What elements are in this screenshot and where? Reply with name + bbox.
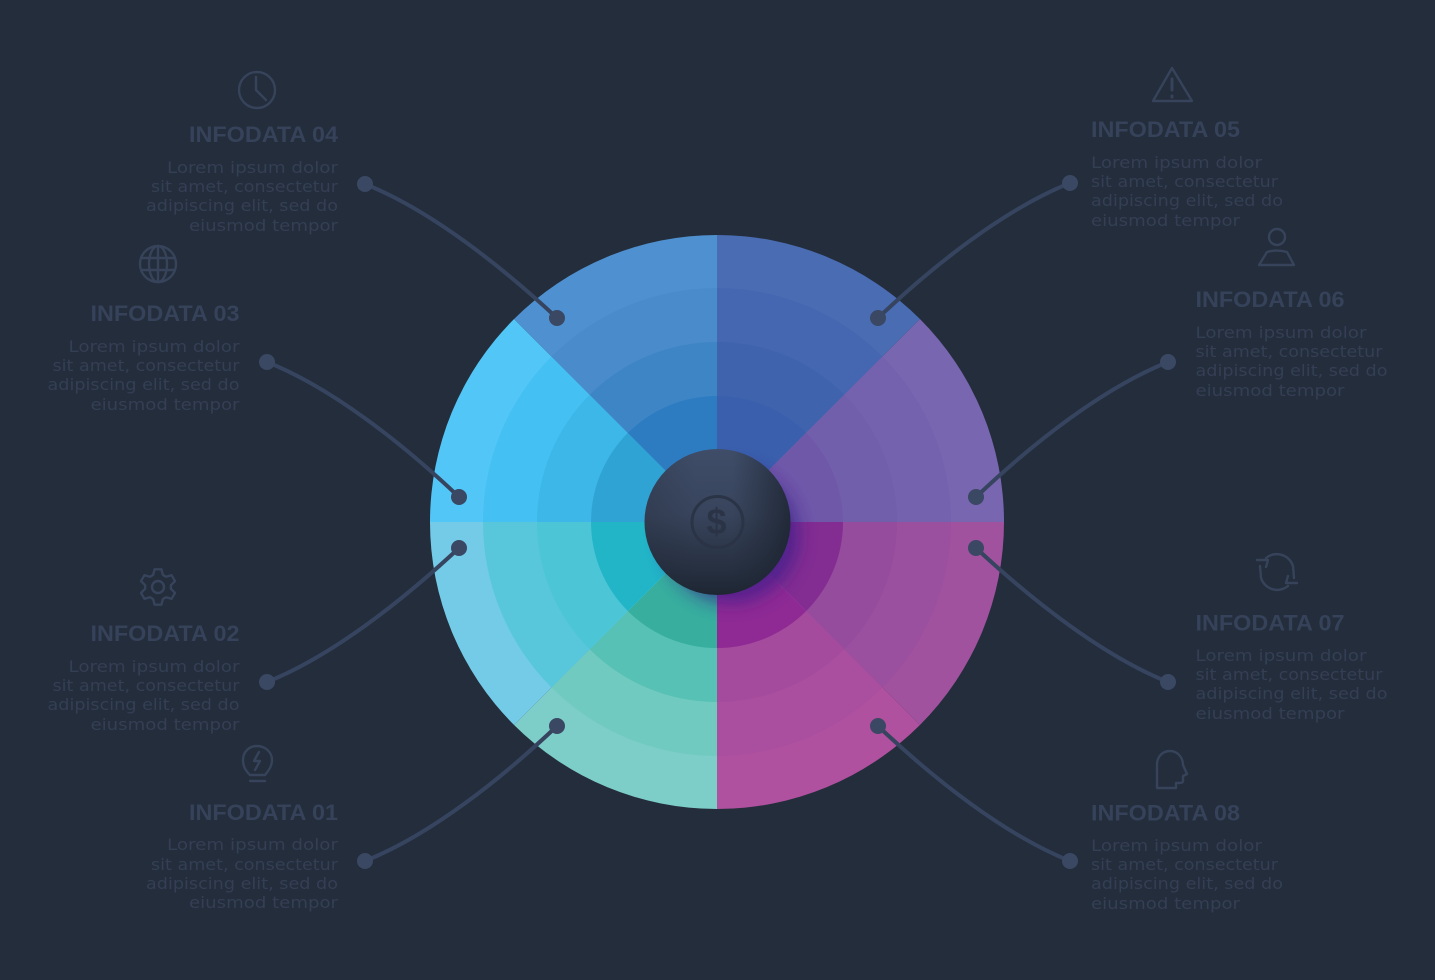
body 07: Lorem ipsum dolor <box>1196 646 1367 665</box>
body 03: sit amet, consectetur <box>52 356 240 375</box>
body 02: sit amet, consectetur <box>52 676 240 695</box>
icon: globe <box>140 246 176 282</box>
icon: person on map <box>1259 229 1294 265</box>
body 01: sit amet, consectetur <box>151 855 338 874</box>
body 05: sit amet, consectetur <box>1091 172 1278 191</box>
connector 03 <box>259 354 467 505</box>
body 03: eiusmod tempor <box>90 395 240 414</box>
body 08: adipiscing elit, sed do <box>1091 874 1283 893</box>
segment: top left <box>514 235 717 470</box>
body 03: adipiscing elit, sed do <box>48 375 240 394</box>
body 04: sit amet, consectetur <box>151 177 338 196</box>
body 06: eiusmod tempor <box>1196 381 1345 400</box>
segment: bottom right <box>717 574 920 809</box>
icon: warning triangle <box>1153 68 1192 101</box>
body 08: eiusmod tempor <box>1091 894 1240 913</box>
heading 01: INFODATA 01 <box>189 800 338 825</box>
heading 06: INFODATA 06 <box>1196 287 1344 312</box>
icon: clock <box>239 72 275 108</box>
heading 05: INFODATA 05 <box>1091 117 1240 142</box>
body 03: Lorem ipsum dolor <box>68 337 240 356</box>
body 04 <box>146 158 338 235</box>
body 06: adipiscing elit, sed do <box>1196 361 1388 380</box>
block: infodata 05 <box>1091 68 1283 230</box>
ball shadow <box>663 467 799 603</box>
connector 05 <box>870 175 1078 326</box>
segment: left upper <box>430 319 666 522</box>
body 04: Lorem ipsum dolor <box>167 158 338 177</box>
segment: bottom left <box>514 574 717 809</box>
body 05: Lorem ipsum dolor <box>1091 153 1262 172</box>
connector 07 <box>968 540 1176 690</box>
donut wheel <box>430 235 1004 809</box>
body 06: Lorem ipsum dolor <box>1196 323 1367 342</box>
connector 08 <box>870 718 1078 869</box>
segment: left lower <box>430 522 666 725</box>
heading 08: INFODATA 08 <box>1091 800 1240 826</box>
body 01 <box>146 835 338 912</box>
body 05 <box>1091 153 1283 230</box>
connector 06 <box>968 354 1176 505</box>
body 08: sit amet, consectetur <box>1091 855 1278 874</box>
body 07: sit amet, consectetur <box>1196 665 1383 684</box>
icon: gear <box>141 569 175 605</box>
center ball <box>644 449 790 595</box>
icon: light bulb <box>243 746 272 781</box>
connector 01 <box>357 718 565 869</box>
heading 02: INFODATA 02 <box>90 621 240 646</box>
body 05: adipiscing elit, sed do <box>1091 191 1283 210</box>
block: infodata 01 <box>146 746 338 912</box>
body 04: adipiscing elit, sed do <box>146 196 338 215</box>
body 07: adipiscing elit, sed do <box>1196 684 1388 703</box>
segment: right lower <box>769 522 1004 725</box>
body 06 <box>1196 323 1388 400</box>
body 06: sit amet, consectetur <box>1196 342 1383 361</box>
body 02: Lorem ipsum dolor <box>68 657 240 676</box>
segment: top right <box>717 235 920 470</box>
body 08: Lorem ipsum dolor <box>1091 836 1262 855</box>
body 08 <box>1091 836 1283 913</box>
block: infodata 02 <box>48 569 240 734</box>
segment: right upper <box>769 319 1004 522</box>
block: infodata 04 <box>146 72 339 235</box>
body 07: eiusmod tempor <box>1196 704 1345 723</box>
heading 07: INFODATA 07 <box>1196 610 1344 636</box>
body 02: adipiscing elit, sed do <box>48 695 240 714</box>
body 02 <box>48 657 240 734</box>
block: infodata 07 <box>1196 554 1388 723</box>
body 07 <box>1196 646 1388 723</box>
heading 03: INFODATA 03 <box>90 301 240 326</box>
body 04: eiusmod tempor <box>189 216 338 235</box>
body 01: adipiscing elit, sed do <box>146 874 338 893</box>
icon: dollar coin: $ <box>706 501 727 542</box>
body 02: eiusmod tempor <box>90 715 240 734</box>
block: infodata 08 <box>1091 751 1283 913</box>
connector 02 <box>259 540 467 690</box>
block: infodata 03 <box>48 246 240 414</box>
body 05: eiusmod tempor <box>1091 211 1240 230</box>
block: infodata 06 <box>1196 229 1388 400</box>
body 03 <box>48 337 240 414</box>
connector 04 <box>357 176 565 326</box>
body 01: Lorem ipsum dolor <box>167 835 338 854</box>
icon: refresh arrows <box>1257 554 1297 590</box>
heading 04: INFODATA 04 <box>189 122 339 147</box>
icon: head profile <box>1157 751 1187 788</box>
icon: dollar coin <box>692 496 743 548</box>
body 01: eiusmod tempor <box>189 893 338 912</box>
